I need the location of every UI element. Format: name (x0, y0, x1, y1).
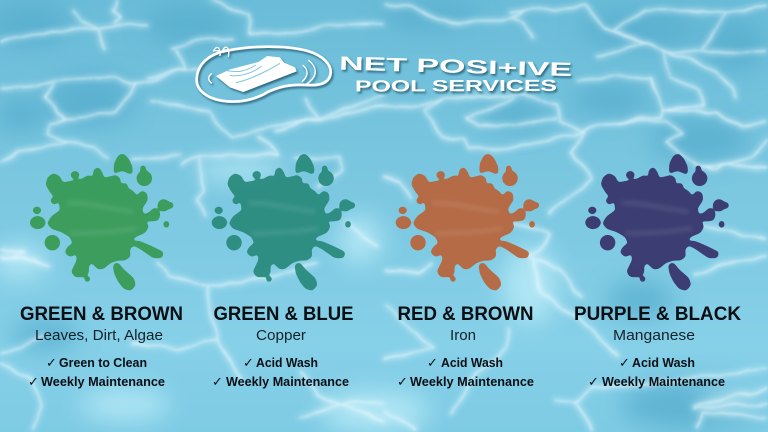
subtitle: Copper (256, 327, 306, 344)
splat: purple and black (586, 154, 729, 290)
treatment 1: Acid Wash (256, 355, 318, 370)
heading: RED & BROWN (398, 304, 534, 325)
treatment 2: ✓ (397, 375, 408, 390)
splat: red and brown (396, 154, 539, 290)
panel: green and brown text (20, 304, 183, 390)
treatment 2: ✓ (212, 375, 223, 390)
subtitle: Manganese (613, 327, 695, 344)
subtitle: Iron (450, 327, 476, 344)
treatment 2: ✓ (28, 375, 39, 390)
heading: PURPLE & BLACK (574, 304, 741, 325)
logo text: Net Positive: NET POSI+IVE (339, 54, 572, 81)
logo text: Pool Services: POOL SERVICES (355, 78, 558, 95)
treatment 1: Green to Clean (59, 355, 147, 370)
panel: green and blue text (212, 304, 354, 390)
panel: red and brown text (397, 304, 534, 390)
treatment 2: Weekly Maintenance (41, 374, 165, 389)
heading: GREEN & BROWN (20, 304, 183, 325)
treatment 2: Weekly Maintenance (602, 374, 725, 389)
splat: green and brown (30, 154, 173, 290)
treatment 2: ✓ (588, 375, 599, 390)
heading: GREEN & BLUE (214, 304, 354, 325)
panel: purple and black text (574, 304, 741, 390)
logo: Net Positive Pool Services (197, 47, 572, 102)
treatment 1: ✓ (427, 356, 438, 371)
splat: green and blue (212, 154, 355, 290)
treatment 1: Acid Wash (632, 355, 695, 370)
treatment 2: Weekly Maintenance (410, 374, 534, 389)
treatment 1: Acid Wash (441, 355, 503, 370)
treatment 1: ✓ (619, 356, 630, 371)
icon: pool with raft (197, 47, 331, 102)
subtitle: Leaves, Dirt, Algae (35, 327, 163, 344)
treatment 1: ✓ (243, 356, 254, 371)
treatment 2: Weekly Maintenance (226, 374, 349, 389)
treatment 1: ✓ (46, 356, 57, 371)
